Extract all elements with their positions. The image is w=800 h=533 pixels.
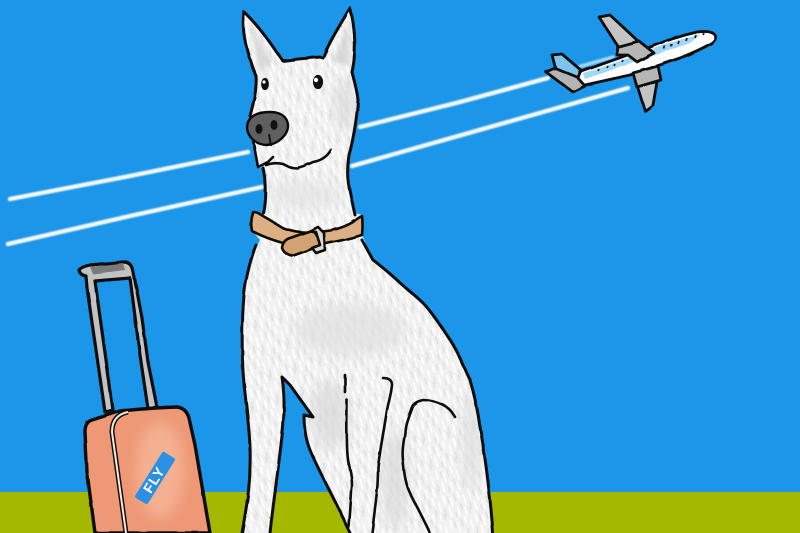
lower engine (633, 66, 661, 87)
tail fin (552, 54, 583, 84)
collar band (251, 212, 362, 247)
dog body silhouette (242, 8, 493, 533)
suitcase (79, 262, 210, 533)
plane windows (598, 33, 704, 71)
buckle (310, 227, 325, 253)
grass ground (0, 492, 800, 533)
fuselage stripe (583, 35, 700, 79)
suitcase highlight (136, 422, 184, 518)
suitcase body (85, 407, 210, 533)
dog (242, 8, 493, 533)
fuselage (576, 31, 716, 85)
fur shading (250, 22, 482, 530)
contrails (8, 57, 628, 244)
upper engine (617, 41, 654, 62)
eyes (262, 75, 323, 90)
upper wing (599, 15, 638, 48)
nose (247, 112, 288, 146)
suitcase seam (112, 412, 128, 533)
collar strap (282, 230, 323, 256)
sticker: FLY (134, 451, 176, 505)
front leg lines (345, 375, 352, 527)
suitcase handle (79, 262, 157, 412)
sticker: FLY: FLY (140, 464, 168, 496)
hind leg haunch (403, 400, 455, 533)
collar (251, 212, 362, 256)
dog outline (242, 8, 493, 533)
lower wing (637, 82, 657, 111)
airplane (546, 15, 716, 111)
stabilizer (546, 68, 585, 92)
